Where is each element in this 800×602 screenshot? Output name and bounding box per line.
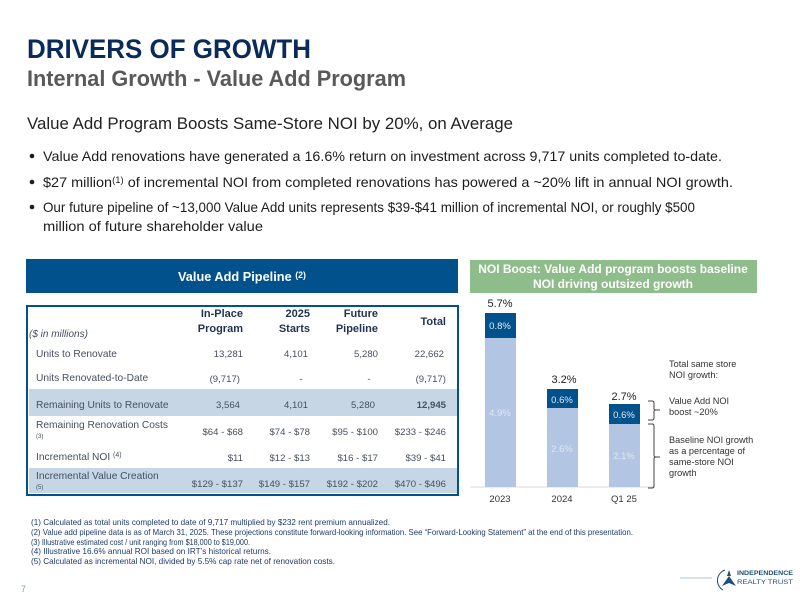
section heading: Value Add Program Boosts Same-Store NOI by 20%, on Average — [27, 114, 513, 133]
panel: value add pipeline banner — [26, 259, 458, 293]
icon: logo tower — [717, 560, 736, 590]
footnotes: (1) Calculated as total units completed to date of 9,717 multiplied by $232 rent premium annualized. — [31, 517, 390, 527]
bar: 2024 — [547, 374, 578, 505]
table header — [198, 308, 446, 335]
row: incremental value creation: $149 - $157 — [259, 479, 310, 490]
legend: baseline growth label: Baseline NOI growth — [669, 435, 753, 445]
footnotes: (4) Illustrative 16.6% annual ROI based on IRT’s historical returns. — [31, 546, 271, 556]
row: units renovated to date — [36, 373, 446, 385]
row: remaining costs: $95 - $100 — [332, 427, 378, 438]
bar: 2024: 2.6% — [551, 444, 573, 455]
subtitle: Internal Growth - Value Add Program — [27, 66, 406, 91]
footnotes: (3) Illustrative estimated cost / unit ranging from $18,000 to $19,000. — [31, 537, 250, 547]
row: incremental value creation: (5) — [36, 485, 43, 491]
row: incremental noi: (4) — [113, 452, 122, 459]
bar: 2023: 4.9% — [489, 408, 511, 419]
legend: value add boost label: boost ~20% — [669, 407, 718, 417]
table header: Starts — [279, 323, 310, 335]
bar: 2023: 2023 — [489, 494, 511, 505]
table header: Pipeline — [336, 323, 378, 335]
row: units to renovate — [36, 349, 444, 360]
row: remaining units: 12,945 — [417, 400, 447, 411]
bar: 2023 — [485, 298, 516, 505]
legend: baseline growth label: same-store NOI — [669, 457, 734, 467]
panel: noi boost heading — [470, 260, 757, 293]
table header: In-Place — [201, 308, 243, 320]
row: units to renovate: 22,662 — [415, 349, 444, 360]
bar: q1 25: 2.1% — [613, 451, 635, 462]
table header: Total — [421, 316, 446, 328]
bar: q1 25 — [609, 391, 640, 505]
bar: q1 25: Q1 25 — [611, 494, 637, 505]
icon: upper brace — [648, 401, 660, 420]
row: units renovated to date: (9,717) — [210, 374, 240, 385]
panel: value add pipeline banner: (2) — [295, 270, 306, 280]
footnotes: (5) Calculated as incremental NOI, divided by 5.5% cap rate net of renovation costs. — [31, 556, 335, 566]
row: units to renovate: 4,101 — [284, 349, 308, 360]
logo: independence realty trust — [717, 560, 794, 590]
legend: baseline growth label: as a percentage of — [669, 446, 746, 456]
panel: value add pipeline table — [27, 306, 458, 495]
logo: independence realty trust: INDEPENDENCE — [737, 570, 794, 577]
bullet list: of incremental NOI from completed renovations has powered a ~20% lift in annual NOI growth. — [124, 175, 733, 190]
row: incremental value creation: $192 - $202 — [327, 479, 378, 490]
row: incremental value creation: $129 - $137 — [192, 479, 243, 490]
legend: total same store label: Total same store — [669, 359, 736, 369]
bullet list — [30, 149, 733, 234]
row: incremental noi: $12 - $13 — [269, 453, 310, 464]
row: incremental noi: $16 - $17 — [337, 453, 378, 464]
row: units renovated to date: - — [299, 374, 303, 385]
row: units to renovate: Units to Renovate — [36, 349, 117, 360]
row: incremental noi — [36, 452, 446, 464]
row: remaining units: Remaining Units to Renovate — [36, 400, 169, 411]
legend: total same store label: NOI growth: — [669, 370, 718, 380]
legend: baseline growth label — [669, 435, 753, 478]
row: units renovated to date: - — [367, 374, 371, 385]
row: remaining costs: $74 - $78 — [269, 427, 310, 438]
legend: value add boost label: Value Add NOI — [669, 396, 729, 406]
row: incremental noi: $11 — [228, 453, 243, 464]
row: remaining units: 3,564 — [216, 400, 241, 411]
legend: total same store label — [669, 359, 736, 380]
row: incremental noi: Incremental NOI — [36, 452, 110, 463]
row: remaining units — [36, 400, 447, 411]
row: remaining costs: $233 - $246 — [395, 427, 446, 438]
bar: 2023: 5.7% — [487, 298, 513, 310]
row: units to renovate: 13,281 — [214, 349, 243, 360]
bullet list: (1) — [112, 175, 124, 185]
row: remaining costs: $64 - $68 — [202, 427, 243, 438]
row: incremental value creation: $470 - $496 — [395, 479, 446, 490]
page number: 7 — [21, 584, 26, 594]
row: remaining units: 4,101 — [284, 400, 308, 411]
row: units to renovate: 5,280 — [354, 349, 378, 360]
bullet list: $27 million — [43, 175, 108, 190]
table header: 2025 — [286, 308, 310, 320]
legend: value add boost label — [669, 396, 729, 417]
row: remaining units: 5,280 — [351, 400, 375, 411]
panel: value add pipeline banner: Value Add Pipeline — [178, 269, 294, 284]
units note: ($ in millions) — [29, 329, 88, 340]
bar: 2024: 0.6% — [551, 395, 573, 406]
legend: baseline growth label: growth — [669, 468, 697, 478]
icon: lower brace — [648, 424, 660, 488]
footnotes: (2) Value add pipeline data is as of March 31, 2025. These projections constitute forward-looking information. See “Forward-Looking Statement” at the end of this presentation. — [31, 527, 633, 537]
row: remaining costs: Remaining Renovation Costs — [36, 420, 168, 431]
bullet list: Value Add renovations have generated a 16.6% return on investment across 9,717 units completed to-date. — [43, 149, 722, 164]
bar: 2023: 0.8% — [489, 321, 511, 332]
row: incremental value creation — [36, 471, 446, 491]
row: incremental value creation: Incremental Value Creation — [36, 471, 159, 482]
bullet list: Our future pipeline of ~13,000 Value Add units represents $39-$41 million of incremental NOI, or roughly $500 — [43, 200, 695, 215]
bar: q1 25: 0.6% — [613, 410, 635, 421]
row: units renovated to date: Units Renovated-to-Date — [36, 373, 148, 384]
bullet list: million of future shareholder value — [43, 219, 263, 234]
bar: q1 25: 2.7% — [611, 391, 637, 403]
row: remaining costs — [36, 420, 446, 440]
table header: Program — [198, 323, 243, 335]
panel: noi boost heading: NOI driving outsized growth — [533, 277, 693, 291]
table header: Future — [344, 308, 378, 320]
bar: 2024: 2024 — [551, 494, 573, 505]
title: DRIVERS OF GROWTH — [27, 34, 311, 64]
logo: independence realty trust: REALTY TRUST — [737, 579, 793, 586]
row: units renovated to date: (9,717) — [416, 374, 446, 385]
panel: noi boost heading: NOI Boost: Value Add program boosts baseline — [478, 262, 748, 276]
bar chart — [470, 298, 655, 505]
footnotes — [31, 517, 633, 566]
row: remaining costs: (3) — [36, 434, 43, 440]
row: incremental noi: $39 - $41 — [405, 453, 446, 464]
bar: 2024: 3.2% — [551, 374, 577, 386]
